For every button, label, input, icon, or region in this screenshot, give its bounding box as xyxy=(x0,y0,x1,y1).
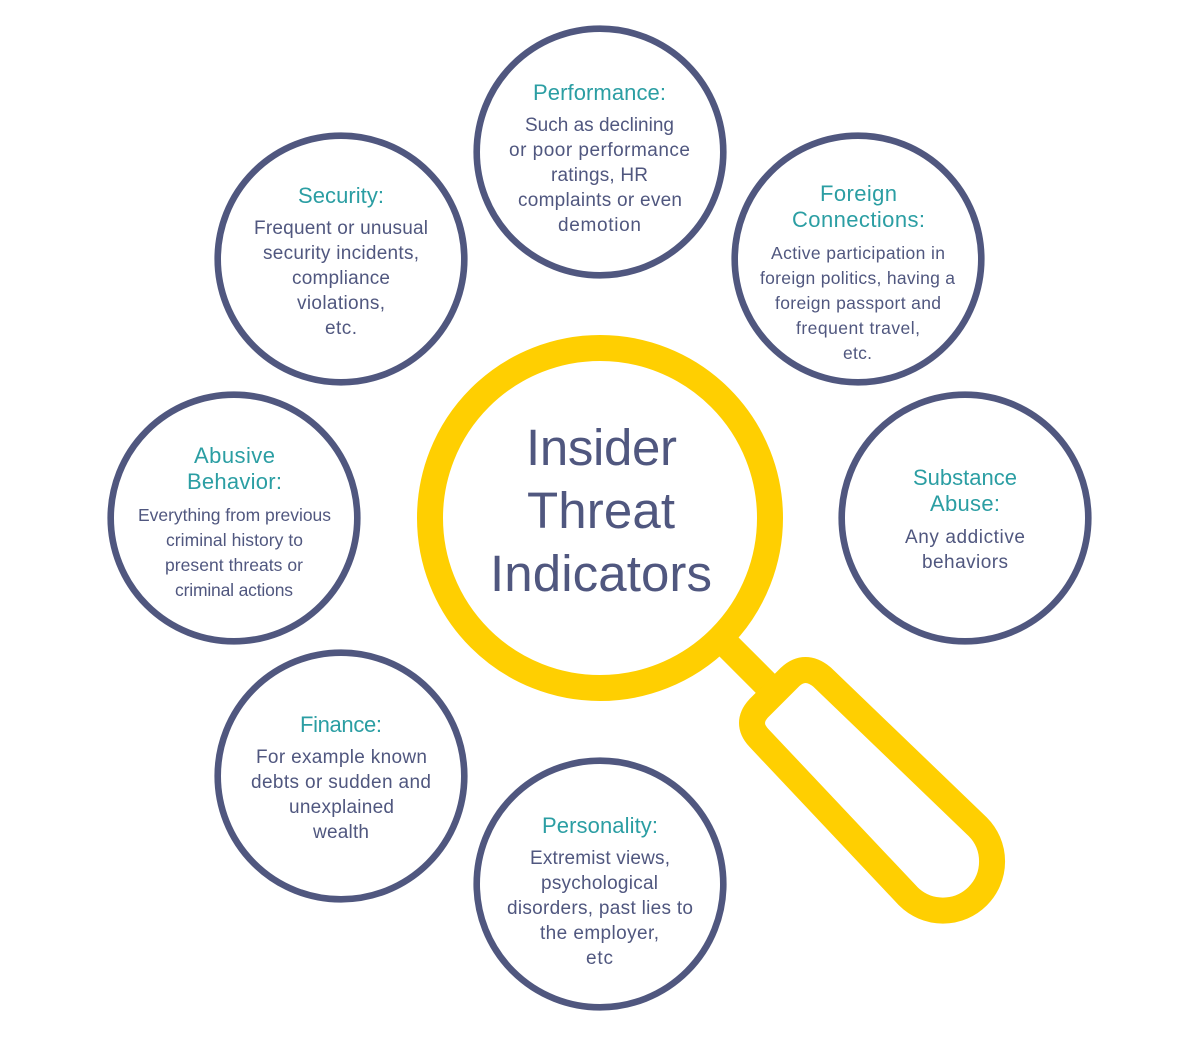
panel: security: etc. xyxy=(325,318,357,339)
panel: substance abuse xyxy=(842,395,1088,641)
panel: abusive behavior: Abusive xyxy=(194,443,275,468)
panel: personality: psychological xyxy=(541,873,658,894)
panel: foreign connections xyxy=(735,136,981,382)
panel: security: Security: xyxy=(298,183,384,208)
panel: finance: Finance: xyxy=(300,712,382,737)
panel: finance: debts or sudden and xyxy=(251,772,431,793)
panel: abusive behavior xyxy=(111,395,357,641)
panel: performance: ratings, HR xyxy=(551,165,648,186)
panel: foreign connections: Foreign xyxy=(820,181,897,206)
panel: personality: Personality: xyxy=(542,813,658,838)
panel: substance abuse: Abuse: xyxy=(930,491,1000,516)
panel: finance: unexplained xyxy=(289,797,394,818)
panel: personality: the employer, xyxy=(540,923,659,944)
panel: foreign connections: etc. xyxy=(843,343,872,363)
panel: foreign connections: Active participation in xyxy=(771,243,945,263)
panel: personality xyxy=(477,761,723,1007)
panel: abusive behavior: criminal history to xyxy=(166,530,303,550)
title xyxy=(490,419,712,602)
magnifying glass xyxy=(430,348,992,911)
panel: performance xyxy=(477,29,723,275)
panel: foreign connections: foreign politics, having a xyxy=(760,268,955,288)
panel: finance: For example known xyxy=(256,747,427,768)
title: Indicators xyxy=(490,545,712,602)
magnifier handle xyxy=(752,670,992,911)
panel: performance: demotion xyxy=(558,215,641,236)
panel: substance abuse: behaviors xyxy=(922,552,1008,573)
magnifier handle connector xyxy=(722,640,778,696)
panel: performance: Performance: xyxy=(533,80,666,105)
panel: personality: disorders, past lies to xyxy=(507,898,693,919)
panel: finance: wealth xyxy=(312,822,369,843)
panel: performance: complaints or even xyxy=(518,190,682,211)
panel: abusive behavior: criminal actions xyxy=(175,580,293,600)
panel: substance abuse: Any addictive xyxy=(905,527,1025,548)
panel: personality: Extremist views, xyxy=(530,848,670,869)
panel: abusive behavior: Everything from previous xyxy=(138,505,331,525)
panel: personality: etc xyxy=(586,948,613,969)
panel: security: violations, xyxy=(297,293,385,314)
panel: substance abuse: Substance xyxy=(913,465,1017,490)
panel: foreign connections: foreign passport and xyxy=(775,293,941,313)
panel: security: Frequent or unusual xyxy=(254,218,428,239)
panel: security: compliance xyxy=(292,268,390,289)
panel: security: security incidents, xyxy=(263,243,419,264)
panel: security xyxy=(218,136,464,382)
panel: abusive behavior: Behavior: xyxy=(187,469,282,494)
title: Threat xyxy=(527,482,675,539)
panel: abusive behavior: present threats or xyxy=(165,555,303,575)
title: Insider xyxy=(526,419,677,476)
panel: performance: or poor performance xyxy=(509,140,690,161)
panel: performance: Such as declining xyxy=(525,115,674,136)
panel: foreign connections: Connections: xyxy=(792,207,925,232)
panel: finance xyxy=(218,653,464,899)
magnifier lens xyxy=(430,348,770,688)
panel: foreign connections: frequent travel, xyxy=(796,318,920,338)
